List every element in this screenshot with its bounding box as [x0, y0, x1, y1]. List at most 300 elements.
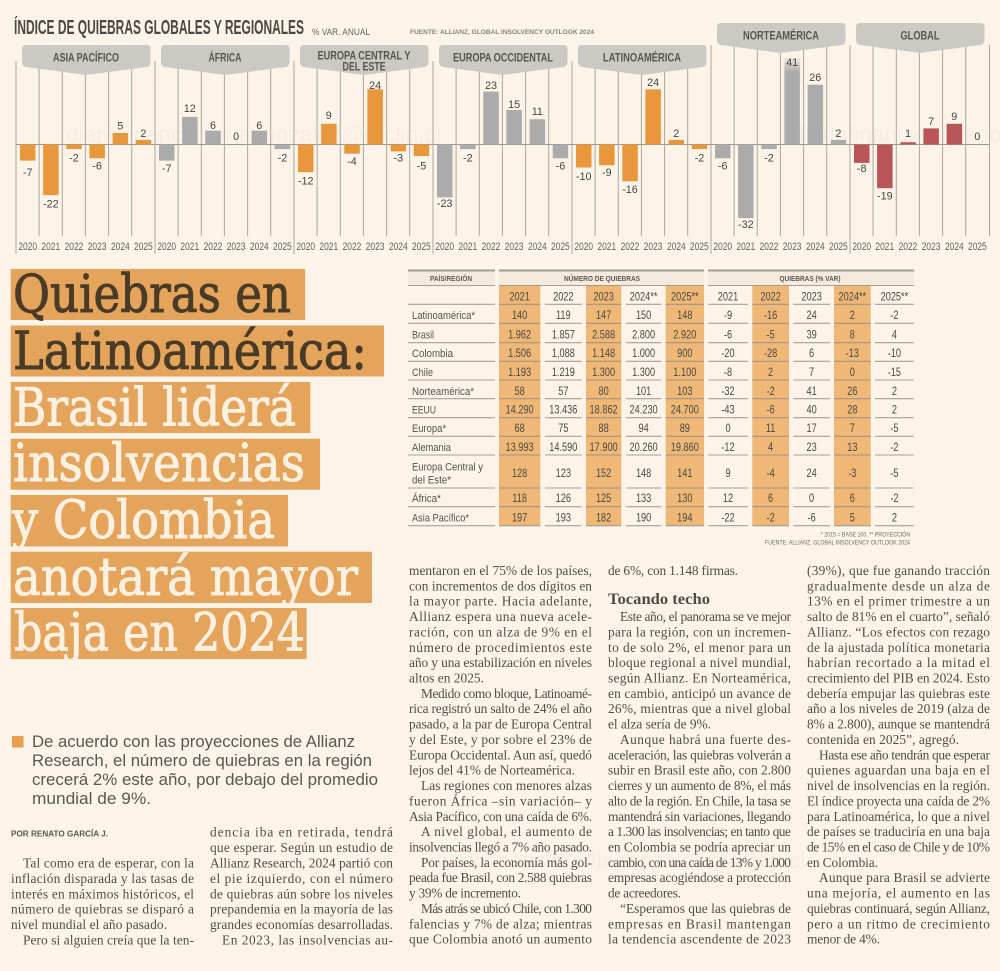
table row: Norteamérica: 58 [515, 386, 525, 398]
panel: Norteamérica: -32 [738, 219, 754, 231]
panel: Norteamérica: 2025 [829, 241, 848, 253]
text column 5: para Latinoamérica, lo que a nivel [807, 809, 990, 824]
text column 4: para la región, con un incremen- [608, 624, 791, 639]
table year row [509, 292, 908, 304]
table row: Colombia: -28 [764, 348, 777, 360]
table row: Colombia: 1.000 [632, 348, 655, 360]
table row: Europa Central y del Este: del Este* [412, 474, 451, 486]
table row: EEUU [412, 404, 897, 417]
table row: Chile: 1.300 [632, 367, 655, 379]
text column 1: número de quiebras se disparó a [11, 902, 194, 917]
text column 5: menor de 4%. [807, 932, 880, 947]
table rules [408, 304, 914, 526]
table row: Norteamérica: Norteamérica* [412, 386, 474, 398]
text column 1: Tal como era de esperar, con la [23, 856, 194, 871]
panel: Europa Central y del Este: -12 [298, 176, 314, 188]
panel: África [155, 45, 292, 254]
standfirst: crecerá 2% este año, por debajo del promedio [32, 770, 378, 789]
table row: Asia Pacífico: 2 [892, 513, 897, 525]
table row: Europa: 89 [680, 423, 690, 435]
table row: Colombia: -13 [846, 348, 859, 360]
panel: Global [850, 23, 990, 254]
panel: Europa Central y del Este: 2021 [319, 241, 338, 253]
text column 3: y 39% de incremento. [409, 886, 521, 901]
text column 3: peada fue Brasil, con 2.588 quiebras [409, 870, 592, 885]
panel: África: 2024 [250, 241, 269, 253]
table row: Brasil: Brasil [412, 330, 434, 342]
table row: Europa Central y del Este: 152 [596, 468, 611, 480]
table row: Europa: 94 [639, 423, 649, 435]
text column 1: interés en máximos históricos, el [11, 886, 194, 901]
table row: Colombia: 1,088 [552, 348, 575, 360]
watermark: body: diariofinanciero#lagonzalez@e-clip.cl [430, 848, 805, 873]
table row: EEUU: EEUU [412, 404, 436, 416]
table row: Chile: -8 [724, 367, 732, 379]
table row: Norteamérica: -32 [721, 386, 735, 398]
panel: Europa Central y del Este: -5 [417, 160, 426, 172]
panel: Asia Pacífico: 2 [140, 128, 146, 140]
panel: Europa Occidental: 2022 [482, 241, 500, 253]
table row: África: África* [412, 492, 441, 505]
table row: Europa Central y del Este: -5 [890, 468, 899, 480]
text column 5: pero a un ritmo de crecimiento [807, 916, 990, 931]
panel: Asia Pacífico: 2025 [134, 241, 153, 253]
panel: Asia Pacífico: 5 [117, 120, 123, 132]
panel: Norteamérica [711, 23, 848, 254]
table row: Brasil: -5 [767, 330, 775, 342]
table row: Colombia: 6 [809, 348, 814, 360]
text column 4: cambio, con una caída de 13% y 1.000 [608, 855, 791, 870]
table row: África [412, 492, 899, 505]
table row: Norteamérica: 57 [558, 386, 569, 398]
text column 3: Allianz espera una nueva acele- [409, 609, 592, 624]
text column 4: to de solo 2%, el menor para un [608, 640, 791, 655]
table row: Latinoamérica: 140 [512, 310, 527, 322]
watermark: chart [66, 122, 1000, 147]
text column 4: 26%, mientras que a nivel global [608, 701, 791, 716]
text column 4: aceleración, las quiebras volverán a [608, 747, 791, 762]
text column 3: Europa Occidental. Aun así, quedó [409, 747, 592, 762]
headline: Latinoamérica: [13, 322, 367, 382]
table row: Colombia [412, 348, 901, 360]
byline: POR RENATO GARCÍA J. [11, 829, 108, 839]
table row: Norteamérica: 101 [636, 386, 651, 398]
panel: Latinoamérica: -2 [695, 152, 704, 164]
text column 3: ración, con un alza de 9% en el [409, 624, 592, 639]
table row: África: 133 [636, 493, 651, 505]
text column 3: la mayor parte. Hacia adelante, [409, 594, 592, 609]
text column 3: con incrementos de dos dígitos en [409, 578, 592, 593]
table row: Norteamérica [412, 386, 897, 398]
panel: Latinoamérica: -9 [602, 167, 612, 179]
panel: Europa Central y del Este: DEL ESTE [342, 62, 386, 74]
panel: Europa Central y del Este: 2025 [412, 241, 431, 253]
panel: Europa Occidental: -2 [463, 152, 473, 164]
table row: Asia Pacífico: 197 [512, 513, 527, 525]
table row: Colombia: -10 [888, 348, 901, 360]
panel: Global: 2022 [899, 241, 917, 253]
panel: África: 2020 [157, 241, 176, 253]
table row: Latinoamérica: -16 [764, 310, 777, 322]
text column 2: de quiebras aún sobre los niveles [210, 886, 393, 901]
table footnote [765, 530, 911, 547]
text column 3: que Colombia anotó un aumento [409, 932, 592, 947]
table row: Norteamérica: 103 [677, 386, 693, 398]
text column 4: mantendrá sin variaciones, llegando [608, 809, 791, 824]
table row: África: 118 [512, 493, 527, 505]
text column 5: de países se traduciría en una baja [807, 824, 990, 839]
panel: Europa Occidental: 11 [532, 106, 543, 118]
table row: Brasil: 39 [807, 330, 817, 342]
text column 1: nivel mundial el año pasado. [11, 917, 167, 932]
table row: Latinoamérica: 2 [850, 310, 855, 322]
text column 4: el alza sería de 9%. [608, 717, 711, 732]
table row: Chile: 2 [768, 367, 773, 379]
table row: Colombia: Colombia [412, 348, 454, 360]
table row: Colombia: -20 [721, 348, 735, 360]
text column 4: de 6%, con 1.148 firmas. [608, 563, 738, 578]
panel: Latinoamérica: 2024 [667, 241, 686, 253]
panel: Europa Central y del Este: -3 [393, 152, 403, 164]
table row: Asia Pacífico: 193 [556, 513, 571, 525]
text column 4: cierres y un aumento de 8%, el más [608, 778, 791, 793]
table row: Latinoamérica: 147 [596, 310, 611, 322]
text column 4 [608, 563, 792, 947]
panel: Norteamérica: 2023 [783, 241, 801, 253]
text column 5: El índice proyecta una caída de 2% [807, 793, 990, 808]
table row: Alemania: 17.900 [590, 442, 618, 454]
table row: Brasil: 2.588 [592, 330, 615, 342]
panel: Latinoamérica: -16 [622, 184, 638, 196]
panel: Europa Central y del Este: -4 [347, 156, 357, 168]
table row: Europa: 75 [558, 423, 569, 435]
panel: Europa Occidental: 15 [508, 99, 520, 111]
panel: Norteamérica: 41 [786, 57, 798, 69]
table row: Norteamérica: 2 [892, 386, 897, 398]
table row: Norteamérica: 80 [599, 386, 609, 398]
table row: Brasil: 2.800 [632, 330, 655, 342]
table row: Brasil [412, 330, 897, 342]
panel: Global: 9 [951, 111, 957, 123]
panel: Norteamérica: 2024 [806, 241, 825, 253]
table row: Brasil: -6 [724, 330, 732, 342]
table row: Colombia: 1.148 [592, 348, 615, 360]
table row: África: 125 [596, 493, 611, 505]
table row: EEUU: 24.230 [630, 405, 658, 417]
table row: Asia Pacífico: 190 [636, 513, 651, 525]
chart heading: ÍNDICE DE QUIEBRAS GLOBALES Y REGIONALES [14, 16, 304, 39]
text column 4: Este año, el panorama se ve mejor [620, 609, 792, 624]
text column 5: una mejoría, el aumento en las [807, 886, 990, 901]
table year row: 2022 [760, 292, 781, 304]
text column 5: salto de 81% en el cuarto”, señaló [807, 609, 990, 624]
text column 5: nivel de insolvencias en la región. [807, 778, 990, 793]
text column 3: Las regiones con menores alzas [421, 778, 592, 793]
table row: Europa: 17 [807, 423, 817, 435]
table row: Europa: 11 [766, 423, 776, 435]
table row: África: 130 [677, 493, 693, 505]
panel: Europa Occidental: -6 [556, 160, 565, 172]
headline: insolvencias [13, 434, 305, 494]
table year row: 2025** [671, 292, 699, 304]
table row: Europa Central y del Este: 123 [556, 468, 571, 480]
table header [408, 270, 914, 286]
table row: Colombia: 1.506 [508, 348, 531, 360]
panel: Europa Occidental: 23 [485, 80, 497, 92]
text column 3: Por países, la economía más gol- [421, 855, 592, 870]
chart heading: % VAR. ANUAL [312, 27, 370, 38]
table row: Chile: 0 [850, 367, 855, 379]
panel: África: 2025 [273, 241, 292, 253]
table row: Colombia: 900 [677, 348, 693, 360]
panel: Europa Central y del Este: 9 [326, 110, 332, 122]
panel: Latinoamérica [572, 45, 709, 254]
panel: Asia Pacífico: -6 [92, 160, 102, 172]
table row: Brasil: 1.857 [552, 330, 575, 342]
text column 5: de la ajustada política monetaria [807, 640, 990, 655]
table row: Brasil: 4 [892, 330, 897, 342]
table year row: 2025** [881, 292, 908, 304]
text column 4: la tendencia ascendente de 2023 [608, 932, 791, 947]
text column 2: dencia iba en retirada, tendrá [210, 825, 393, 840]
text column 4: de acreedores. [608, 886, 681, 901]
table row: Latinoamérica [412, 310, 899, 322]
text column 3: Asia Pacífico, con una caída de 6%. [409, 809, 592, 824]
table row: Asia Pacífico [412, 512, 897, 525]
table row: Europa Central y del Este: -4 [767, 468, 775, 480]
text column 5: habrían recortado a la mitad el [807, 655, 990, 670]
panel: Latinoamérica: 24 [647, 77, 659, 89]
panel: Norteamérica: 2021 [736, 241, 755, 253]
panel: África: ÁFRICA [208, 52, 242, 64]
panel: Latinoamérica: 2022 [621, 241, 639, 253]
table header: PAÍS/REGIÓN [430, 274, 472, 283]
table row: Europa Central y del Este: 9 [725, 468, 731, 480]
table row: Alemania: 19.860 [671, 442, 699, 454]
text column 3: Más atrás se ubicó Chile, con 1.300 [421, 901, 592, 916]
text column 3: falencias y 7% de alza; mientras [409, 916, 592, 931]
table row: África: -2 [890, 493, 899, 505]
table row: África: 6 [850, 493, 855, 505]
text column 4: bloque regional a nivel mundial, [608, 655, 791, 670]
table row: Chile: 1.219 [552, 367, 575, 379]
table row: Alemania: Alemania [412, 442, 452, 454]
panel: Europa Occidental: 2020 [435, 241, 454, 253]
text column 5: Hasta ese año tendrán que esperar [819, 747, 991, 762]
headline: anotará mayor [13, 548, 358, 608]
table row: Norteamérica: -2 [767, 386, 775, 398]
zero baseline [16, 144, 989, 146]
text column 2: grandes economías desarrolladas. [210, 917, 393, 932]
table row: Asia Pacífico: -2 [767, 513, 775, 525]
table row: Chile: 1.193 [508, 367, 531, 379]
standfirst: Research, el número de quiebras en la región [32, 751, 372, 770]
panel: Global: 2025 [968, 241, 987, 253]
table row: Europa: 68 [515, 423, 525, 435]
text column 5: en Colombia. [807, 855, 878, 870]
text column 5: 8% a 2.800), aunque se mantendrá [807, 717, 990, 732]
table year row: 2021 [509, 292, 530, 304]
text column 5: contenida en 2025”, agregó. [807, 732, 959, 747]
table row: Europa Central y del Este: 24 [807, 468, 817, 480]
panel: Global: 1 [905, 128, 911, 140]
table row: Europa: 88 [599, 423, 609, 435]
text column 3 [409, 563, 592, 947]
text column 5: quiebras continuará, según Allianz, [807, 901, 990, 916]
table row: Europa Central y del Este [412, 462, 899, 486]
panel: Global: 2021 [875, 241, 894, 253]
table footnote: FUENTE: ALLIANZ, GLOBAL INSOLVENCY OUTLOOK 2024 [765, 540, 910, 547]
table year row: 2023 [593, 292, 614, 304]
table row: Europa: Europa* [412, 423, 446, 435]
table row: Brasil: 8 [850, 330, 855, 342]
text column 4: Aunque habrá una fuerte des- [620, 732, 791, 747]
panel: África: 6 [256, 120, 262, 132]
panel: Europa Occidental: EUROPA OCCIDENTAL [453, 52, 553, 64]
table row: Asia Pacífico: Asia Pacífico* [412, 512, 469, 524]
table row: Alemania: 14.590 [549, 442, 578, 454]
panel: Norteamérica: 2020 [713, 241, 732, 253]
panel: Europa Central y del Este: 2024 [389, 241, 408, 253]
table row: Europa: 0 [725, 423, 731, 435]
text column 5: Allianz. “Los efectos con rezago [807, 624, 990, 639]
table row: EEUU: 13.436 [549, 405, 578, 417]
standfirst: De acuerdo con las proyecciones de Allianz [32, 732, 355, 751]
panel: África: 6 [210, 120, 216, 132]
panel: Europa Occidental: 2023 [505, 241, 523, 253]
table row: Asia Pacífico: 5 [850, 513, 855, 525]
table row: Alemania: 13.993 [506, 442, 534, 454]
panel: Europa Occidental [433, 45, 570, 254]
panel: Europa Occidental: 2025 [551, 241, 570, 253]
table row: Asia Pacífico: -22 [721, 513, 735, 525]
icon: orange bullet square [12, 736, 24, 748]
panel: Norteamérica: -2 [764, 152, 774, 164]
panel: Latinoamérica: 2025 [690, 241, 709, 253]
text column 4: empresas acogiéndose a protección [608, 870, 791, 885]
panel: Europa Central y del Este: 2020 [296, 241, 315, 253]
panel: Latinoamérica: LATINOAMÉRICA [603, 52, 681, 64]
panel: Asia Pacífico: 2024 [111, 241, 130, 253]
data table [408, 270, 914, 526]
table row: Europa: -5 [890, 423, 899, 435]
text column 5: crecimiento del PIB en 2024. Esto [807, 670, 990, 686]
panel: Global: 2024 [945, 241, 964, 253]
table row: Europa: 7 [850, 423, 855, 435]
table row: Asia Pacífico: 182 [596, 513, 611, 525]
panel: Europa Central y del Este [294, 45, 431, 254]
standfirst: mundial de 9%. [32, 789, 151, 808]
table row: EEUU: 14.290 [506, 405, 534, 417]
text column 3: insolvencias llegó a 7% año pasado. [409, 840, 592, 854]
panel: Global: -8 [857, 163, 867, 175]
text column 4: a 1.300 las insolvencias; en tanto que [608, 824, 791, 839]
table year row: 2022 [553, 292, 574, 304]
text column 5: (39%), que fue ganando tracción [807, 563, 990, 578]
panel: África: 2022 [204, 241, 222, 253]
table row: Chile: -15 [888, 367, 901, 379]
text column 2: Allianz Research, 2024 partió con [210, 856, 393, 871]
panel: Europa Occidental: -23 [437, 198, 453, 210]
text column 3: fueron África –sin variación– y [409, 793, 592, 808]
text column 5: de 15% en el caso de Chile y de 10% [807, 840, 990, 854]
table row: Europa Central y del Este: 128 [512, 468, 527, 480]
table year row: 2023 [801, 292, 822, 304]
panel: Asia Pacífico: ASIA PACÍFICO [53, 52, 119, 64]
table footnote: * 2015 = BASE 100, ** PROYECCIÓN [821, 530, 911, 538]
panel: Latinoamérica: 2 [673, 128, 679, 140]
text column 3: rica registró un salto de 24% el año [409, 701, 592, 716]
panel: Asia Pacífico: -22 [43, 198, 59, 210]
table row: Chile: 1.300 [592, 367, 615, 379]
table row: Latinoamérica: 150 [636, 310, 651, 322]
text column 1 [11, 856, 194, 947]
panel: Global: GLOBAL [900, 30, 940, 42]
chart heading: FUENTE: ALLIANZ, GLOBAL INSOLVENCY OUTLOOK 2024 [410, 29, 594, 36]
panel: Global: 2023 [922, 241, 940, 253]
table row: Alemania: -2 [890, 442, 899, 454]
text column 5: Aunque para Brasil se advierte [819, 870, 990, 885]
panel: Europa Central y del Este: 2022 [343, 241, 361, 253]
table row: Norteamérica: 26 [847, 386, 858, 398]
text column 2: prepandemia en la mayoría de las [210, 902, 393, 917]
text column 3: A nivel global, el aumento de [421, 824, 592, 839]
table row: Europa Central y del Este: -3 [848, 468, 857, 480]
panel: Asia Pacífico: 2022 [65, 241, 83, 253]
text column 3: Medido como bloque, Latinoamé- [421, 686, 592, 701]
panel: Asia Pacífico: 2020 [18, 241, 37, 253]
panel: Latinoamérica: 2021 [597, 241, 616, 253]
text column 3: año y una estabilización en niveles [409, 655, 592, 670]
panel: Europa Occidental: 2021 [458, 241, 477, 253]
text column 4: subir en Brasil este año, con 2.800 [608, 763, 791, 778]
subheading: Tocando techo: Tocando techo [608, 591, 710, 608]
table row: EEUU: -6 [767, 405, 775, 417]
panel: África: 12 [184, 103, 196, 115]
panel: África: -2 [278, 152, 287, 164]
panel: Europa Central y del Este: 24 [369, 80, 381, 92]
table row: Latinoamérica: Latinoamérica* [412, 310, 475, 322]
panel: Latinoamérica: 2020 [574, 241, 593, 253]
table row: Europa Central y del Este: Europa Central y [412, 462, 483, 474]
table row: Alemania: 13 [847, 442, 858, 454]
table row: Brasil: 1.962 [508, 330, 531, 342]
table row: Europa Central y del Este: 148 [636, 468, 651, 480]
text column 3: altos en 2025. [409, 670, 484, 686]
table header: NÚMERO DE QUIEBRAS [564, 274, 640, 283]
panel: Norteamérica: 2 [835, 128, 841, 140]
text column 3: número de procedimientos este [409, 640, 592, 655]
table row: África: 126 [556, 493, 571, 505]
table row: África: 6 [768, 493, 773, 505]
text column 3: lejos del 41% de Norteamérica. [409, 763, 575, 778]
table row: Chile: Chile [412, 367, 433, 379]
table row: África: 12 [723, 493, 733, 505]
table row: Latinoamérica: -9 [724, 310, 732, 322]
panel: África: -7 [162, 163, 172, 175]
table row: Chile: 7 [809, 367, 814, 379]
table row: Alemania: -12 [721, 442, 735, 454]
headline: Brasil liderá [13, 379, 296, 439]
headline: baja en 2024 [14, 604, 305, 664]
panel: Asia Pacífico [16, 45, 153, 254]
text column 5: quienes aguardan una baja en el [807, 763, 990, 778]
table row: África: 0 [809, 493, 814, 505]
text column 3: y del Este, y por sobre el 23% de [409, 732, 592, 747]
table row: EEUU: -43 [721, 405, 735, 417]
panel: Asia Pacífico: -2 [69, 152, 79, 164]
panel: Global: 0 [974, 131, 980, 143]
